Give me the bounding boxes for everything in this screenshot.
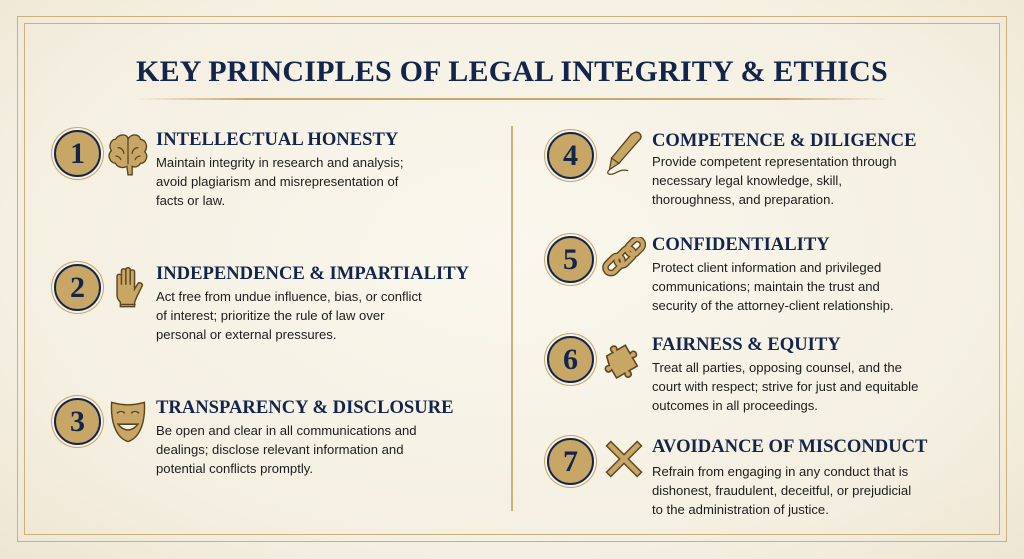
text: to the administration of justice.: [652, 502, 829, 517]
text: thoroughness, and preparation.: [652, 192, 834, 207]
text: dealings; disclose relevant information and: [156, 442, 403, 457]
text: outcomes in all proceedings.: [652, 398, 818, 413]
text: Provide competent representation through: [652, 154, 897, 169]
item 6: fairness: 6: [563, 343, 578, 376]
heading: CONFIDENTIALITY: [652, 234, 830, 255]
text: [156, 155, 403, 208]
text: communications; maintain the trust and: [652, 279, 880, 294]
text: avoid plagiarism and misrepresentation of: [156, 174, 398, 189]
text: Protect client information and privileged: [652, 260, 881, 275]
icon: glove: [116, 267, 144, 308]
text: [652, 360, 918, 413]
text: potential conflicts promptly.: [156, 461, 313, 476]
item 3: transparency: 3: [70, 405, 85, 438]
item 2: independence: 2: [70, 271, 85, 304]
item 1: intellectual honesty: 1: [70, 137, 85, 170]
heading: TRANSPARENCY & DISCLOSURE: [156, 397, 454, 418]
icon: brain: [108, 134, 148, 176]
text: court with respect; strive for just and equitable: [652, 379, 918, 394]
text: [652, 464, 911, 517]
icon: puzzle: [604, 344, 638, 379]
heading: AVOIDANCE OF MISCONDUCT: [652, 436, 927, 457]
icon: chain: [602, 237, 646, 276]
item 6: fairness: [544, 333, 918, 413]
text: Be open and clear in all communications and: [156, 423, 417, 438]
item 5: confidentiality: 5: [563, 243, 578, 276]
text: [156, 289, 422, 342]
text: personal or external pressures.: [156, 327, 336, 342]
heading: INDEPENDENCE & IMPARTIALITY: [156, 263, 469, 284]
text: Maintain integrity in research and analysis;: [156, 155, 403, 170]
text: Refrain from engaging in any conduct that is: [652, 464, 908, 479]
icon: X: [606, 440, 642, 478]
icon: mask: [110, 401, 146, 442]
item 3: transparency: [51, 395, 454, 476]
heading: FAIRNESS & EQUITY: [652, 334, 841, 355]
item 7: misconduct: 7: [563, 445, 578, 478]
item 4: competence: 4: [563, 139, 578, 172]
text: facts or law.: [156, 193, 225, 208]
text: Treat all parties, opposing counsel, and the: [652, 360, 902, 375]
heading: INTELLECTUAL HONESTY: [156, 129, 398, 150]
text: [156, 423, 417, 476]
item 5: confidentiality: [544, 233, 894, 313]
text: necessary legal knowledge, skill,: [652, 173, 842, 188]
item 1: intellectual honesty: [51, 127, 403, 208]
text: [652, 260, 894, 313]
text: security of the attorney-client relationship.: [652, 298, 894, 313]
item 7: misconduct: [544, 435, 928, 517]
icon: pen: [607, 131, 642, 175]
item 4: competence: [544, 129, 916, 207]
text: dishonest, fraudulent, deceitful, or prejudicial: [652, 483, 911, 498]
text: [652, 154, 897, 207]
text: of interest; prioritize the rule of law over: [156, 308, 385, 323]
item 2: independence: [51, 261, 469, 342]
title: KEY PRINCIPLES OF LEGAL INTEGRITY & ETHICS: [136, 55, 888, 88]
heading: COMPETENCE & DILIGENCE: [652, 130, 916, 151]
text: Act free from undue influence, bias, or conflict: [156, 289, 422, 304]
